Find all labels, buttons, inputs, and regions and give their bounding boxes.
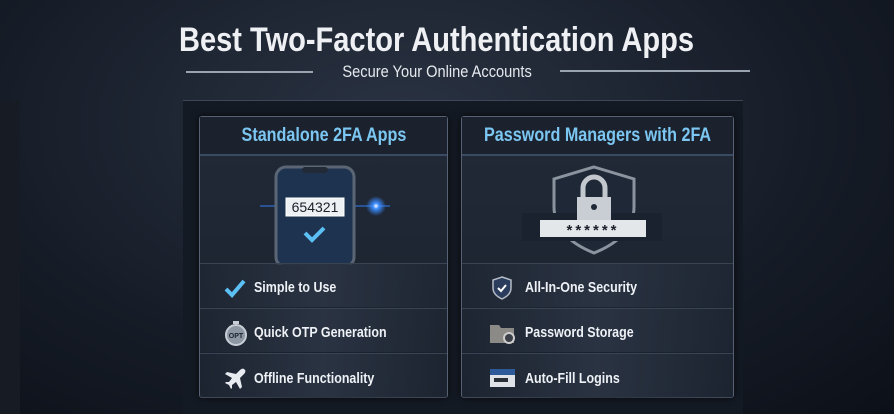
panel: password managers — [461, 116, 734, 398]
item: password storage — [462, 308, 733, 352]
panel: standalone 2FA apps — [199, 116, 448, 398]
item: auto-fill — [462, 353, 733, 398]
subtitle: Secure Your Online Accounts — [342, 62, 532, 81]
item: quick OTP — [200, 308, 447, 352]
item: auto-fill: Auto-Fill Logins — [525, 370, 620, 386]
item: all-in-one — [462, 263, 733, 307]
icon: shield lock — [540, 165, 646, 254]
item: password storage: Password Storage — [525, 324, 634, 341]
heading: standalone: Standalone 2FA Apps — [241, 124, 406, 146]
icon: phone with code — [260, 166, 390, 265]
title: Best Two-Factor Authentication Apps — [179, 21, 694, 59]
item: offline — [200, 353, 447, 398]
icon: shield lock: ****** — [566, 222, 620, 239]
item: quick OTP: OPT — [229, 332, 244, 340]
item: quick OTP: Quick OTP Generation — [254, 324, 387, 341]
heading: password managers: Password Managers with 2FA — [484, 124, 711, 146]
item: offline: Offline Functionality — [254, 370, 374, 386]
item: simple to use — [200, 263, 447, 307]
item: simple to use: Simple to Use — [254, 279, 336, 296]
heading: password managers — [462, 117, 733, 156]
item: all-in-one: All-In-One Security — [525, 279, 637, 296]
icon: phone with code: 654321 — [292, 199, 339, 215]
heading: standalone — [200, 117, 447, 156]
background inner frame — [183, 100, 743, 414]
